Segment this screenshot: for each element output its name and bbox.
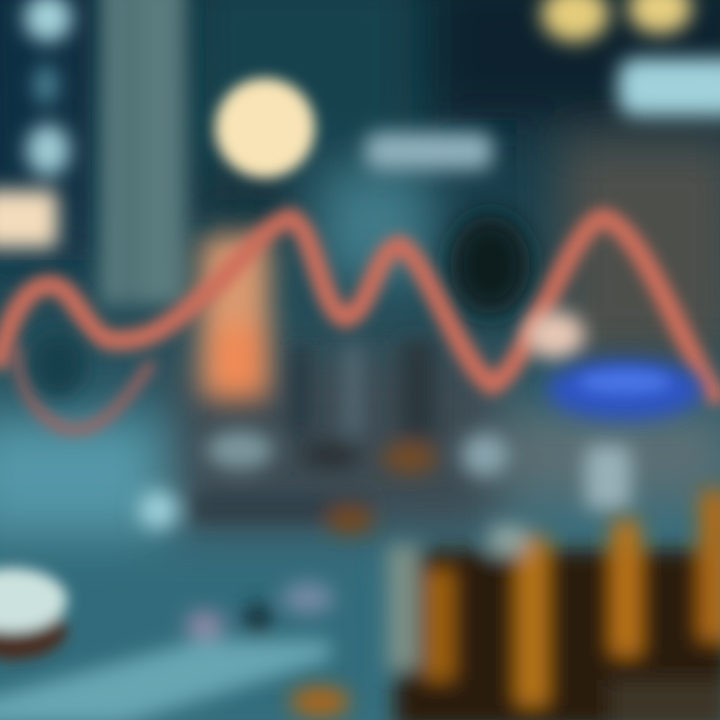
bottom-left dish: [0, 568, 67, 660]
light label pills: [365, 58, 720, 170]
dark blob behind line: [450, 215, 530, 315]
vertical column: [100, 0, 186, 305]
bottom-left light strip: [0, 582, 334, 720]
blue ellipse: [547, 360, 703, 420]
orange glow: [200, 235, 270, 400]
sun circle: [215, 78, 315, 178]
top yellow lights: [541, 0, 692, 42]
dark circle inside loop: [30, 333, 86, 397]
red line chart: [0, 218, 715, 430]
mid-chart grey details: [138, 340, 631, 534]
highlight on line: [525, 311, 585, 359]
left light blobs: [0, 0, 72, 248]
bottom-right orange bars: [290, 490, 720, 720]
